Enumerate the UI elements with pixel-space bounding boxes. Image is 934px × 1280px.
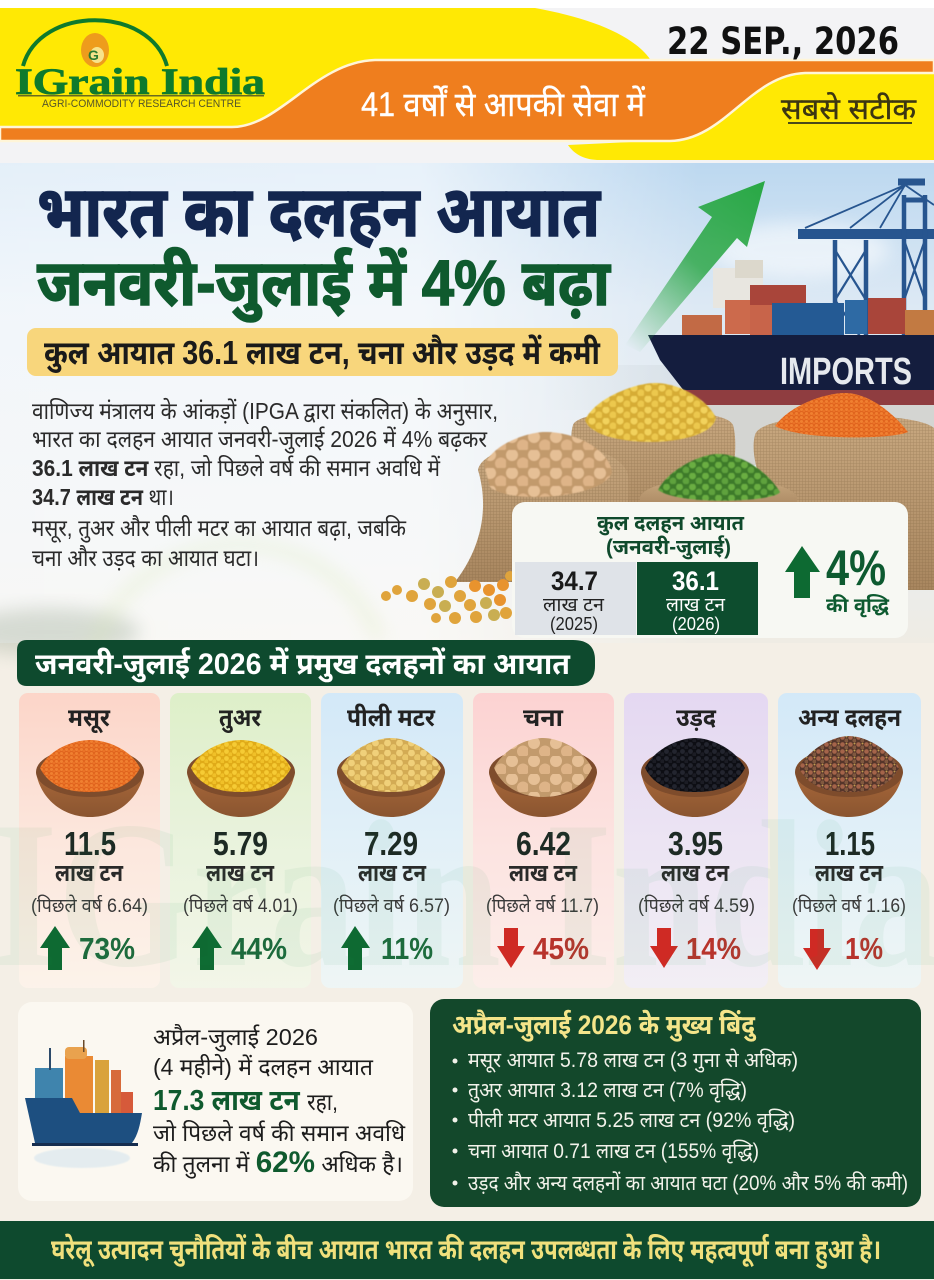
card: tur: लाख टन (206, 860, 275, 887)
summary text: अप्रैल-जुलाई 2026 (153, 1024, 318, 1052)
title: जनवरी-जुलाई में 4% बढ़ा (37, 247, 611, 323)
down arrow (803, 929, 831, 970)
card: other pulses (778, 693, 921, 988)
sack: yellow peas (571, 383, 735, 540)
card: masoor: (पिछले वर्ष 6.64) (31, 894, 148, 917)
header band (0, 0, 934, 165)
bullet list: चना आयात 0.71 लाख टन (155% वृद्धि) (468, 1139, 759, 1164)
bowl (36, 740, 144, 817)
tagline: 41 वर्षों से आपकी सेवा में (361, 85, 646, 124)
title (37, 173, 611, 323)
card: yellow peas: 11% (381, 931, 433, 966)
bullet list (452, 1048, 908, 1195)
growth percent: 4% (826, 540, 886, 596)
faint rainbow arc (90, 544, 380, 660)
2026 value: लाख टन (666, 595, 725, 616)
bowl (795, 736, 903, 817)
up arrow (192, 926, 222, 970)
card: masoor (19, 693, 160, 988)
card: chana: लाख टन (509, 860, 578, 887)
total imports box: कुल दलहन आयात (597, 512, 745, 536)
card: yellow peas (321, 693, 463, 988)
slogan: सबसे सटीक (781, 91, 917, 126)
total imports box (512, 502, 908, 638)
logo: G (88, 47, 99, 63)
card: chana: 45% (533, 931, 589, 966)
card: urad: लाख टन (661, 860, 730, 887)
card: other pulses: 1% (845, 931, 883, 966)
card: masoor: 73% (79, 931, 135, 966)
sack: red lentil (754, 393, 934, 590)
2025 value: 34.7 (551, 566, 598, 596)
card: other pulses: लाख टन (815, 860, 884, 887)
bullet list: पीली मटर आयात 5.25 लाख टन (92% वृद्धि) (468, 1108, 795, 1133)
summary text: (4 महीने) में दलहन आयात (153, 1054, 374, 1080)
logo (15, 20, 265, 110)
card: urad (624, 693, 768, 988)
card: chana: चना (523, 704, 564, 732)
card: yellow peas: (पिछले वर्ष 6.57) (333, 894, 450, 917)
down arrow (650, 928, 678, 968)
intro text: भारत का दलहन आयात जनवरी-जुलाई 2026 में 4% बढ़कर (32, 426, 488, 454)
intro text: 36.1 लाख टन रहा, जो पिछले वर्ष की समान अवधि में (32, 455, 441, 481)
pulses sacks (381, 383, 934, 624)
card: tur: 44% (231, 931, 287, 966)
card: other pulses: अन्य दलहन (798, 704, 902, 732)
up arrow (341, 926, 370, 970)
panel: April-July summary (18, 1002, 413, 1201)
logo: AGRI-COMMODITY RESEARCH CENTRE (42, 98, 241, 110)
crane (798, 182, 934, 345)
growth percent: की वृद्धि (826, 593, 890, 618)
panel: key points: अप्रैल-जुलाई 2026 के मुख्य बिंदु (452, 1009, 757, 1042)
card: urad: 3.95 (668, 825, 723, 862)
2025 value (515, 562, 636, 635)
card: chana (473, 693, 614, 988)
card: urad: उड़द (676, 704, 717, 732)
intro text: चना और उड़द का आयात घटा। (32, 545, 259, 571)
hero background (0, 163, 934, 660)
card: yellow peas: 7.29 (364, 825, 418, 862)
bullet list: मसूर आयात 5.78 लाख टन (3 गुना से अधिक) (468, 1048, 798, 1073)
card: tur: 5.79 (213, 825, 268, 862)
2026 value: (2026) (672, 614, 720, 634)
card: tur: (पिछले वर्ष 4.01) (183, 894, 298, 917)
2026 value: 36.1 (672, 566, 719, 596)
spilled grains (381, 571, 515, 624)
bowl (337, 738, 445, 817)
2025 value: लाख टन (543, 595, 604, 616)
card: other pulses: (पिछले वर्ष 1.16) (792, 894, 906, 917)
footer banner (0, 1221, 934, 1279)
card: urad: (पिछले वर्ष 4.59) (638, 894, 755, 917)
card: masoor: लाख टन (55, 860, 124, 887)
subtitle banner: कुल आयात 36.1 लाख टन, चना और उड़द में कमी (44, 334, 601, 374)
summary text: की तुलना में 62% अधिक है। (153, 1146, 403, 1179)
section heading: जनवरी-जुलाई 2026 में प्रमुख दलहनों का आयात (35, 647, 571, 683)
ship with containers (648, 260, 934, 405)
sack: chickpeas (455, 432, 628, 582)
total imports box: (जनवरी-जुलाई) (606, 535, 731, 560)
summary text: जो पिछले वर्ष की समान अवधि (153, 1120, 406, 1146)
growth arrow (625, 181, 765, 352)
summary text: 17.3 लाख टन रहा, (153, 1085, 338, 1117)
card: yellow peas: पीली मटर (347, 703, 436, 732)
down arrow (497, 928, 525, 968)
title: भारत का दलहन आयात (37, 173, 602, 252)
card: chana: 6.42 (516, 825, 571, 862)
bowl (489, 738, 597, 817)
intro text: वाणिज्य मंत्रालय के आंकड़ों (IPGA द्वारा संकलित) के अनुसार, (32, 398, 498, 426)
card: masoor: 11.5 (64, 825, 116, 862)
card: tur: तुअर (219, 704, 262, 733)
card: chana: (पिछले वर्ष 11.7) (486, 894, 599, 917)
intro text: 34.7 लाख टन था। (32, 484, 174, 510)
card: tur (170, 693, 311, 988)
bowl (641, 738, 749, 817)
2026 value (637, 562, 758, 635)
summary text (153, 1024, 406, 1179)
up arrow (40, 926, 70, 970)
subtitle banner (27, 328, 618, 376)
logo: IGrain India (15, 62, 265, 103)
icon: cargo ship (25, 1040, 142, 1168)
card: other pulses: 1.15 (825, 825, 875, 862)
bowl (187, 740, 295, 817)
intro text (32, 398, 498, 571)
intro text: मसूर, तुअर और पीली मटर का आयात बढ़ा, जबकि (32, 515, 407, 543)
icon: up arrow (785, 546, 820, 598)
bullet list: तुअर आयात 3.12 लाख टन (7% वृद्धि) (468, 1078, 747, 1103)
card: yellow peas: लाख टन (358, 860, 427, 887)
cloud glow (710, 222, 890, 278)
card: urad: 14% (686, 931, 741, 966)
card: masoor: मसूर (68, 704, 111, 734)
panel: key points (430, 999, 921, 1207)
growth percent (826, 540, 890, 618)
section heading (17, 640, 595, 686)
2025 value: (2025) (550, 614, 598, 634)
sack: green peas (640, 454, 797, 510)
mist hills (0, 608, 140, 656)
